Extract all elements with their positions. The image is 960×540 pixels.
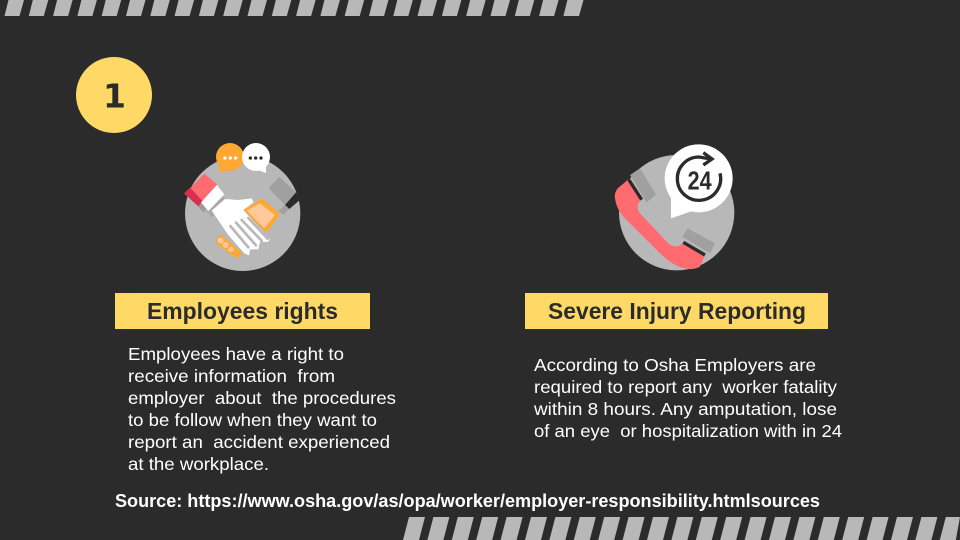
top hazard stripes bbox=[4, 0, 584, 16]
number badge: 1 bbox=[103, 76, 126, 116]
text block: severe injury reporting description bbox=[533, 355, 842, 441]
text block: severe injury reporting description: within 8 hours. Any amputation, lose bbox=[533, 399, 837, 419]
text block: severe injury reporting description: required to report any worker fatality bbox=[534, 377, 837, 397]
heading: Severe Injury Reporting bbox=[525, 293, 828, 329]
heading: Severe Injury Reporting: Severe Injury Reporting bbox=[548, 298, 806, 324]
lower fingers bbox=[216, 235, 242, 259]
icon: phone with 24 hours bubble bbox=[615, 144, 734, 270]
text block: employees rights description: to be follow when they want to bbox=[128, 410, 377, 430]
number badge bbox=[76, 57, 152, 133]
text block: employees rights description: at the workplace. bbox=[128, 454, 269, 474]
icon: handshake bbox=[184, 143, 302, 271]
heading: Employees rights bbox=[115, 293, 370, 329]
text block: employees rights description bbox=[128, 344, 396, 474]
text block: employees rights description: report an accident experienced bbox=[128, 432, 390, 452]
text block: severe injury reporting description: According to Osha Employers are bbox=[534, 355, 816, 375]
source line: Source: https://www.osha.gov/as/opa/worker/employer-responsibility.htmlsources bbox=[115, 491, 820, 511]
text block: employees rights description: receive information from bbox=[128, 366, 335, 386]
text block: severe injury reporting description: of an eye or hospitalization with in 24 bbox=[534, 421, 842, 441]
bottom hazard stripes bbox=[403, 517, 960, 540]
text block: employees rights description: employer about the procedures bbox=[128, 388, 396, 408]
heading: Employees rights: Employees rights bbox=[147, 298, 338, 324]
icon: phone with 24 hours bubble: 24 bbox=[688, 167, 712, 195]
text block: employees rights description: Employees have a right to bbox=[128, 344, 344, 364]
